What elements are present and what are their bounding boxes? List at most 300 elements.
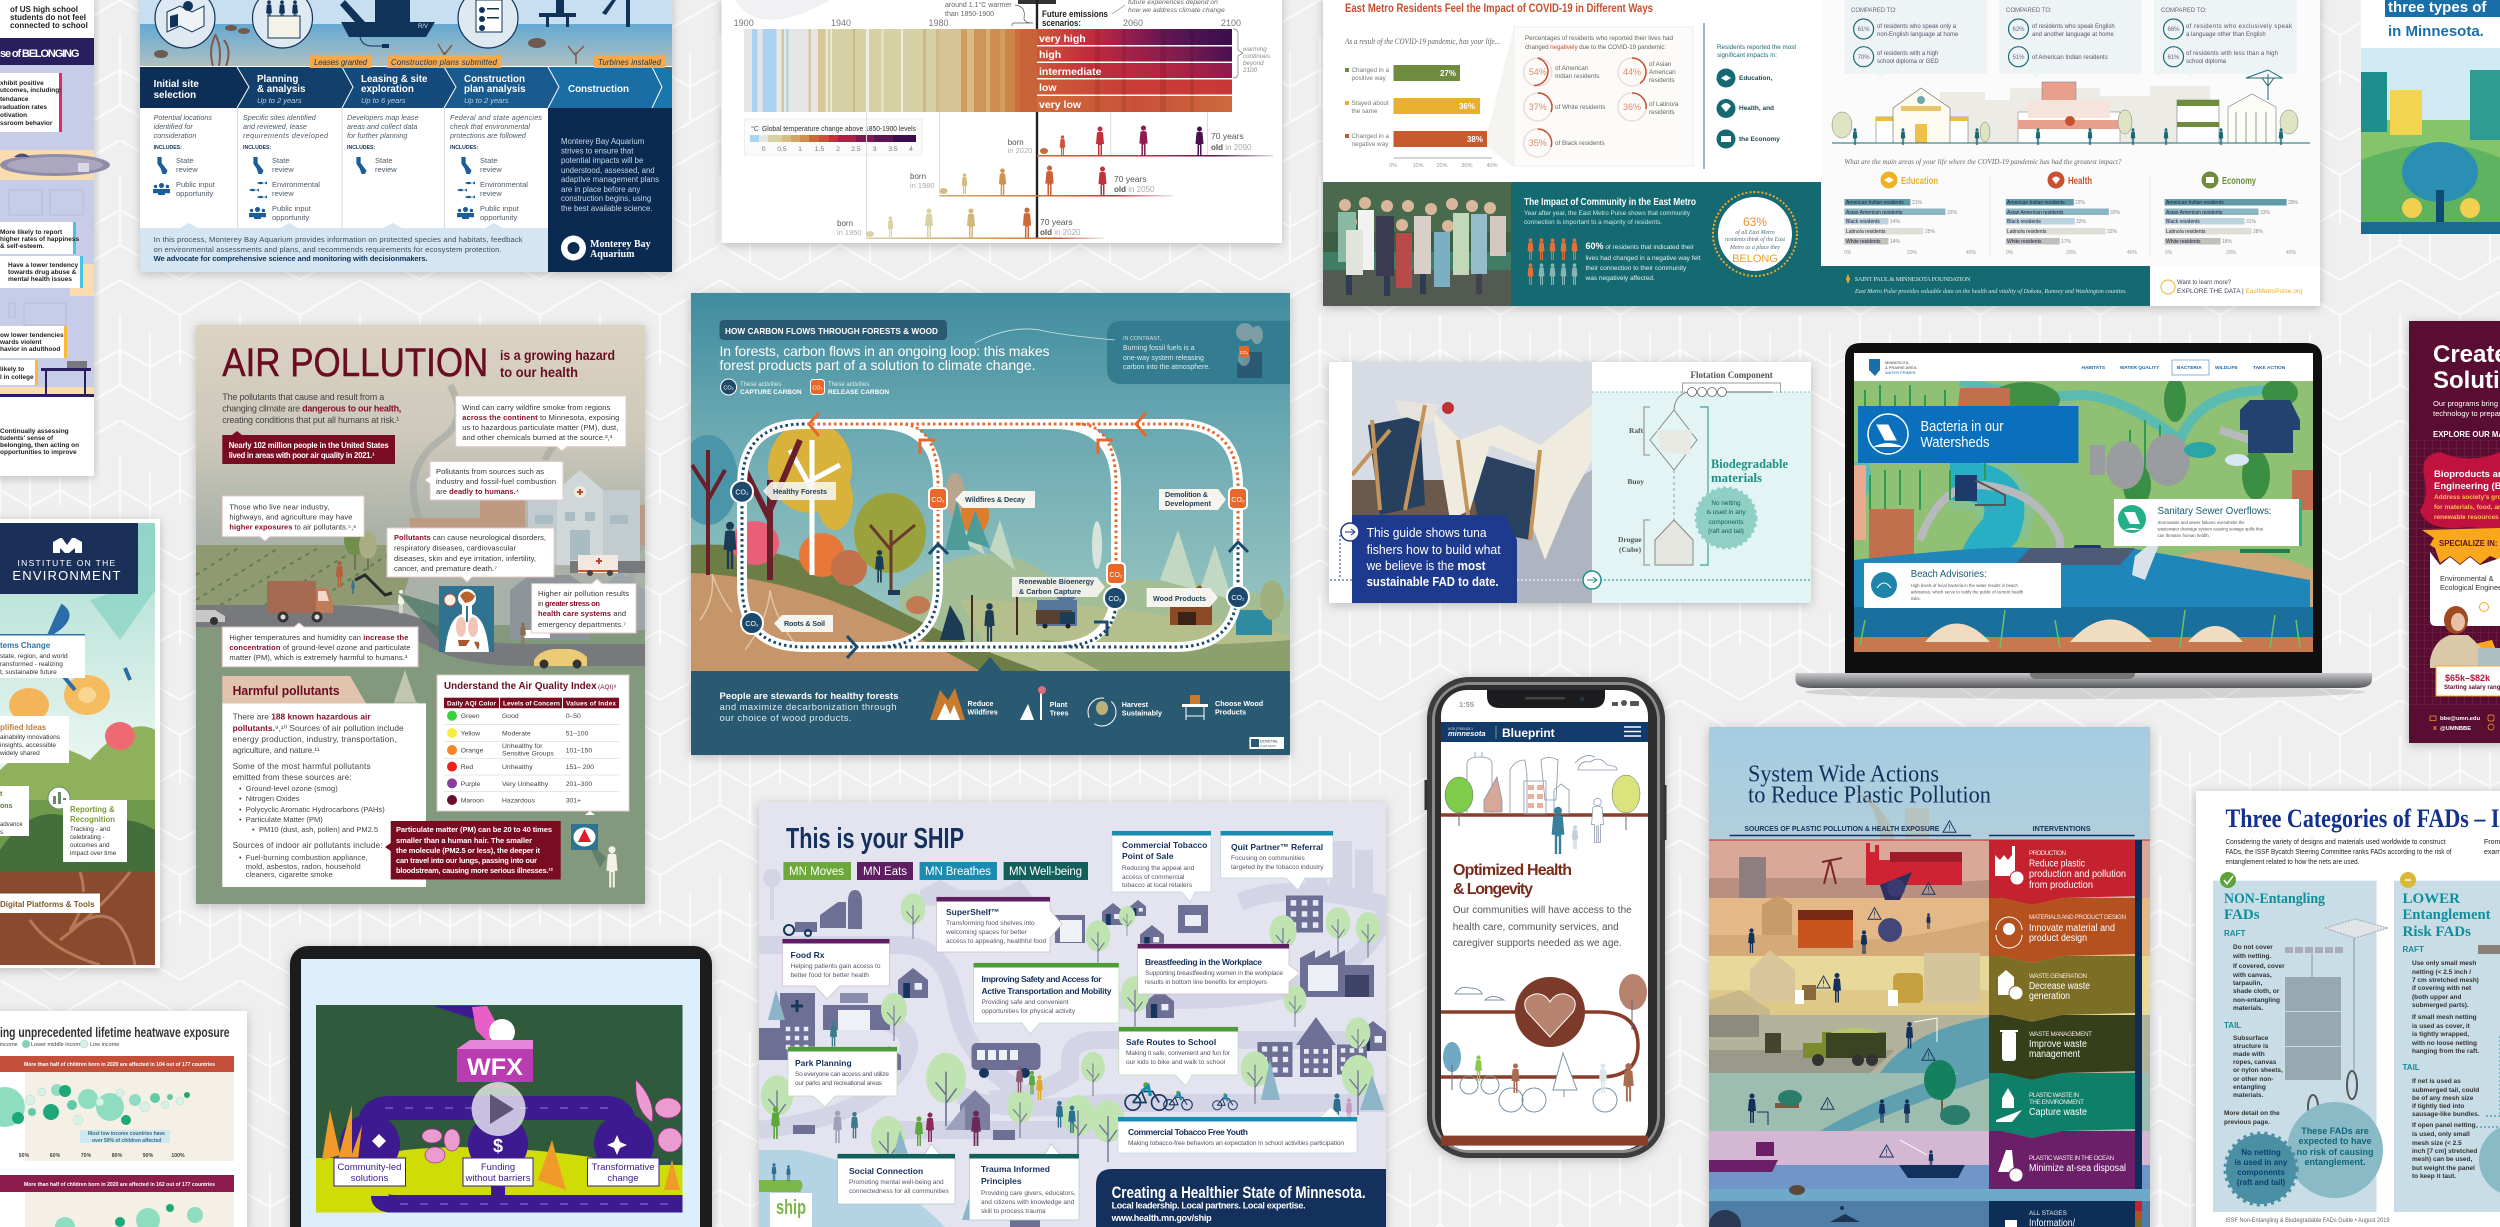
harmful pollutants box: There are 188 known hazardous air (233, 712, 371, 722)
notch and status bar: 1:55 (1459, 700, 1474, 709)
no netting starburst: is used in any (2235, 1158, 2288, 1167)
tail rules: or other non- (2233, 1076, 2273, 1083)
heading: AIR POLLUTION (222, 341, 488, 385)
body text: health care, community services, and (1453, 922, 1619, 933)
advocacy note (140, 223, 548, 272)
card: safety and access: Providing safe and convenient (982, 999, 1069, 1006)
step descriptions: consideration (154, 131, 196, 140)
houses and park (344, 525, 645, 640)
buildings (759, 896, 1374, 1227)
program tags (783, 862, 1088, 880)
charts: education, health, economy: 18% (2222, 239, 2233, 245)
charts: education, health, economy: Asian American residents (1846, 210, 1903, 216)
charts: education, health, economy: American Indian residents (2007, 200, 2065, 206)
soil and roots (0, 872, 155, 965)
callout: temperature and humidity (222, 623, 418, 667)
comparison boxes: of American Indian residents (2032, 55, 2108, 61)
bracket note: 2100 (1242, 67, 1258, 74)
community impact panel: 63% (1743, 215, 1767, 229)
card: amplified ideas: plified Ideas (0, 723, 47, 732)
label: funding without barriers: without barriers (465, 1173, 531, 1184)
raft rules: RAFT (2224, 929, 2245, 938)
app header: Blueprint (1502, 726, 1555, 740)
houses (877, 900, 1388, 1070)
card: drug abuse: towards drug abuse & (8, 269, 77, 276)
air quality index table: Hazardous (502, 798, 535, 804)
charts: education, health, economy: Black residents (2007, 219, 2041, 225)
legend (744, 119, 922, 155)
no netting starburst: components (1709, 519, 1743, 526)
tail rules: materials. (2233, 1092, 2264, 1099)
card: park planning: Park Planning (795, 1058, 852, 1068)
comparison boxes: COMPARED TO: (1851, 8, 1897, 14)
panel: offshore wind process (Monterey Bay Aquarium): State (375, 156, 393, 165)
red band: More than half of children born in 2020 are affected in 104 out of 177 countries (24, 1062, 215, 1068)
column separators (238, 108, 444, 228)
guide statement: sustainable FAD to date. (1367, 574, 1499, 589)
community impact panel: BELONG (1732, 253, 1778, 265)
card: amplified ideas: widely shared (0, 750, 40, 757)
card: violent behavior: wards violent (0, 339, 42, 346)
step descriptions: for further planning (347, 131, 407, 140)
tail rules: ropes, canvas (2233, 1059, 2277, 1066)
air quality index table: Values of Index (566, 700, 616, 708)
flotation component diagram: Drogue (1618, 535, 1642, 544)
river (1856, 381, 2270, 625)
intervention text: THE ENVIRONMENT (2029, 1099, 2084, 1106)
process chevrons: Construction (464, 74, 525, 85)
air quality index table: Green (461, 713, 480, 720)
bracket note: beyond (1243, 60, 1264, 67)
info card: sanitary sewer overflows (2114, 499, 2302, 546)
phone screen (1441, 690, 1648, 1150)
card: tobacco free youth (1118, 1107, 1357, 1153)
card: safety and access: Active Transportation and Mobility (982, 986, 1112, 996)
comparison boxes: 70% (1858, 55, 1870, 61)
bracket note (1233, 29, 1271, 78)
heading: to our health (500, 364, 578, 380)
card: positive outcomes: xhibit positive (0, 80, 44, 87)
generation timeline 2020: 70 years (1211, 131, 1244, 141)
harmful pollutants box: PM10 (dust, ash, pollen) and PM2.5 (259, 825, 378, 834)
contrast box: one-way system releasing (1123, 355, 1204, 362)
marine life (154, 25, 584, 66)
intro: entanglement related to how the nets are used. (2226, 859, 2360, 866)
panel: offshore wind process (Monterey Bay Aquarium) (140, 0, 672, 272)
process chevrons: plan analysis (464, 84, 526, 95)
closing text: tudents' sense of (0, 435, 54, 442)
raft rules: 7 cm stretched mesh) (2412, 977, 2479, 984)
card: systems change: tems Change (0, 641, 51, 650)
expected result circle (2287, 1102, 2383, 1198)
activity labels: Healthy Forests (773, 487, 827, 496)
annotation and axis: 100% (171, 1153, 185, 1159)
charts: education, health, economy: 21% (1912, 200, 1923, 206)
card: drug abuse (0, 256, 83, 288)
future scenario bands (1037, 29, 1232, 112)
carbon nodes: CO₂ (745, 621, 759, 628)
significant impacts list: Education, (1739, 75, 1772, 82)
vehicle: delivery truck (267, 581, 333, 622)
step descriptions: identified for (154, 122, 193, 131)
card: food rx (782, 939, 889, 999)
tail rules: mesh size (< 2.5 (2412, 1140, 2462, 1147)
community impact panel: was negatively affected. (1584, 275, 1655, 282)
side buttons (1426, 780, 1665, 840)
intervention text: Decrease waste (2029, 981, 2090, 992)
stewardship band: Plant (1050, 700, 1068, 709)
annotation and axis: 80% (112, 1153, 123, 1159)
olive tree (854, 493, 926, 590)
air quality index table: 101–150 (566, 748, 592, 754)
card: positive outcomes: raduation rates (0, 104, 47, 111)
charts: education, health, economy: 40% (2127, 250, 2138, 256)
intervention text: management (2029, 1049, 2080, 1060)
logo: ship (770, 1193, 812, 1227)
icon: checklist circle (458, 0, 518, 48)
legend: 2.5 (851, 146, 861, 153)
desk and floor (0, 361, 94, 397)
generation timeline 1980: born (910, 172, 926, 181)
title card (1858, 406, 2078, 463)
main statement (720, 343, 1050, 373)
year axis: 2100 (1221, 18, 1241, 28)
step descriptions: Potential locations (154, 113, 212, 122)
milestone tags: Leases granted (314, 58, 368, 67)
bar chart: life change: 30% (1461, 163, 1473, 169)
card: systems change: ransformed - realizing (0, 661, 63, 668)
card: drug abuse: Have a lower tendency (8, 262, 78, 269)
air quality index table: 0–50 (566, 713, 581, 720)
includes labels (154, 145, 479, 151)
stewardship band: and maximize decarbonization through (720, 702, 896, 713)
grey road (1920, 430, 2280, 580)
tail rules: entangling (2233, 1084, 2266, 1091)
callout: temperature and humidity: concentration of ground-level ozone and particulate (229, 643, 410, 652)
air quality index table: Orange (461, 748, 484, 754)
label: community-led solutions: Community-led (338, 1162, 401, 1173)
card: reporting and recognition (63, 800, 127, 862)
panel: offshore wind process (Monterey Bay Aquarium): review (272, 189, 294, 198)
aquarium statement panel: strives to ensure that (561, 146, 634, 156)
tablet screen (301, 959, 700, 1227)
tagline block: Local leadership. Local partners. Local expertise. (1112, 1200, 1306, 1210)
callout connector (1487, 27, 1514, 166)
intervention text: Capture waste (2029, 1107, 2087, 1118)
activity labels: Roots & Soil (784, 619, 825, 628)
intro paragraph (222, 392, 401, 425)
crimson blob: renewable resources (2434, 514, 2499, 521)
callout: health care stress (532, 579, 636, 633)
raft rules: tarpaulin, (2233, 980, 2262, 987)
legend: 0.5 (777, 146, 787, 153)
info card: beach advisories: risks. (1911, 596, 1921, 601)
guide statement: fishers how to build what (1367, 542, 1501, 557)
grey arc (735, 0, 830, 20)
icon: turbine platform (539, 0, 630, 27)
charts: education, health, economy: 39% (2288, 200, 2299, 206)
legend: capture and release: CAPTURE CARBON (740, 389, 802, 396)
aquarium statement panel: Monterey Bay Aquarium (561, 137, 644, 146)
process chevrons (140, 67, 672, 108)
roots (700, 574, 800, 650)
community impact panel: their connection to their community (1586, 265, 1687, 272)
charts: education, health, economy: Health (2068, 176, 2092, 187)
feature icons (372, 1134, 627, 1156)
bar chart: life change: positive way (1352, 75, 1387, 82)
sleeve and hand (434, 1006, 515, 1045)
intro paragraph: creating conditions that put all humans at risk.¹ (222, 415, 399, 425)
column heading (2402, 891, 2491, 940)
laptop lid (1845, 343, 2322, 673)
card: park planning: So everyone can access and utilize (795, 1071, 889, 1078)
aquarium statement panel: potential impacts will be (561, 156, 643, 165)
page title: East Metro Residents Feel the Impact of COVID-19 in Different Ways (1345, 3, 1653, 15)
grid pattern (2409, 440, 2500, 706)
negative impact by group: American (1649, 69, 1676, 76)
callout: temperature and humidity: matter (PM), which is extremely harmful to humans.³ (229, 653, 408, 662)
card: happiness: & self-esteem. (0, 243, 44, 250)
no netting starburst: No netting (2241, 1148, 2281, 1157)
heading pill (720, 320, 947, 340)
panel: offshore wind process (Monterey Bay Aquarium): State (480, 156, 498, 165)
tail rules: previous page. (2224, 1119, 2270, 1126)
panel: three categories of FADs (2196, 791, 2500, 1227)
icon: research vessel (340, 0, 435, 48)
heading: in Minnesota. (2388, 23, 2484, 40)
expected result circle: entanglement. (2304, 1157, 2366, 1167)
raft rules: Do not cover (2233, 944, 2273, 951)
callout: wildfire smoke: us to hazardous particulate matter (PM), dust, (462, 423, 618, 432)
crimson blob (2420, 452, 2500, 535)
town illustration (1832, 70, 2310, 145)
watershed illustration (1854, 378, 2313, 652)
intervention text: Innovate material and (2029, 923, 2115, 934)
comparison boxes: school diploma (2186, 59, 2227, 65)
legend: 3 (873, 146, 877, 153)
top annotations: than 1850-1900 (945, 11, 994, 18)
dam and water (1854, 548, 2310, 652)
charts: education, health, economy: American Indian residents (2166, 200, 2224, 206)
plant illustration (0, 604, 155, 880)
activity labels: Renewable Bioenergy (1019, 577, 1094, 586)
stewardship band: Sustainably (1122, 708, 1162, 718)
raft rules: if covering with net (2412, 985, 2472, 992)
statistic text: of US high school (10, 5, 78, 14)
tail rules: to keep it taut. (2412, 1173, 2456, 1180)
comparison boxes: non-English language at home (1877, 32, 1959, 38)
callout: health conditions: Pollutants can cause neurological disorders, (394, 533, 546, 542)
card: amplified ideas (0, 716, 69, 763)
lake bed and rocks (1854, 610, 2313, 652)
intervention text: from production (2029, 880, 2093, 891)
negative impact by group: changed negatively due to the COVID-19 pandemic: (1525, 44, 1666, 51)
activity labels: & Carbon Capture (1019, 587, 1081, 596)
legend: 3.5 (888, 146, 898, 153)
biodegradable label: Biodegradable (1711, 457, 1788, 471)
process chevrons: Up to 2 years (464, 96, 509, 105)
lavender background (0, 65, 94, 395)
card: quit partner: targeted by the tobacco industry (1231, 864, 1324, 871)
panel: offshore wind process (Monterey Bay Aquarium): review (375, 165, 397, 174)
column heading: NON-Entangling (2224, 891, 2325, 907)
raft rules: If covered, cover (2233, 963, 2285, 970)
column heading: Risk FADs (2402, 924, 2471, 940)
card: happiness: higher rates of happiness (0, 236, 79, 243)
no netting starburst: is used in any (1706, 509, 1746, 516)
air quality index table: Understand the Air Quality Index (444, 681, 597, 692)
panel: offshore wind process (Monterey Bay Aquarium): review (480, 165, 502, 174)
tail rules: but weight the panel (2412, 1165, 2475, 1172)
website header: HABITATS (2082, 365, 2106, 371)
blue tree (678, 435, 738, 575)
callout: temperature and humidity: Higher temperatures and humidity can increase the (229, 633, 408, 642)
annotation and axis: 90% (143, 1153, 154, 1159)
carbon nodes: CO₂ (1108, 596, 1122, 603)
card: quit partner (1221, 831, 1333, 890)
negative impact by group: of Black residents (1555, 140, 1605, 147)
particulate matter callout: can travel into our lungs, passing into our (396, 856, 537, 865)
legend: capture and release: These activities (740, 382, 781, 388)
generation timeline 2020 (1008, 126, 1273, 156)
purple roads (370, 1108, 683, 1204)
main street shops (2177, 70, 2282, 143)
expected result circle: These FADs are (2301, 1126, 2369, 1136)
stewardship band (691, 657, 1290, 755)
diagram hints (2476, 945, 2500, 1196)
canoe (759, 1163, 802, 1192)
legend: capture and release (721, 379, 889, 396)
contact footer: @UMNBBE (2440, 726, 2471, 732)
harmful pollutants box: Particulate Matter (PM) (246, 815, 323, 824)
comparison boxes: 62% (2012, 27, 2025, 33)
card: supershelf: access to appealing, healthful food (946, 938, 1046, 945)
info card: sanitary sewer overflows: can threaten human health. (2158, 533, 2210, 538)
milestone tags (310, 55, 665, 68)
card: partial text: advance (0, 822, 23, 828)
icon: chart circle (48, 787, 70, 809)
raft rules: If small mesh netting (2412, 1014, 2477, 1021)
intervention text: WASTE GENERATION (2029, 973, 2087, 980)
skyline (763, 841, 1373, 920)
air quality index table: Good (502, 713, 519, 720)
community impact panel: The Impact of Community in the East Metro (1524, 197, 1696, 208)
title card: Bacteria in our (1920, 418, 2004, 435)
callout: fossil fuel (425, 462, 563, 500)
feature circles (340, 1116, 654, 1158)
salary box: $65k–$82k (2445, 673, 2491, 683)
air quality index table: 151– 200 (566, 764, 594, 771)
panel: Institute on the Environment (0, 519, 160, 968)
card: park planning (788, 1047, 897, 1107)
legend: capture and release: RELEASE CARBON (828, 389, 889, 396)
card: systems change: t, sustainable future (0, 669, 57, 676)
negative impact by group: residents (1649, 109, 1675, 116)
comparison boxes: school diploma or GED (1877, 59, 1939, 65)
foundation footer: East Metro Pulse provides valuable data on the health and vitality of Dakota, Ramsey and Washington counties. (1854, 288, 2127, 295)
flotation component diagram (1618, 370, 1780, 565)
vehicle: ambulance (578, 555, 618, 576)
community impact panel: Year after year, the East Metro Pulse shows that community (1524, 210, 1691, 217)
callout: health care stress: health care systems and (538, 609, 626, 618)
vehicle: yellow car (534, 649, 587, 668)
charts: education, health, economy: Education (1901, 176, 1938, 187)
callout: health conditions: respiratory diseases, cardiovascular (394, 544, 516, 552)
bracket note: warming (1243, 46, 1267, 53)
advocacy note: We advocate for comprehensive science and monitoring with decisionmakers. (154, 254, 428, 263)
column heading (2224, 891, 2325, 923)
raft rules: hanging from the raft. (2412, 1048, 2479, 1055)
row 3: waste generation scene (1709, 950, 1989, 1015)
card: college: likely to (0, 366, 24, 373)
callout: higher exposures (222, 496, 364, 541)
icon: harvest sustainably (1088, 698, 1116, 726)
bubble chart lower (25, 1192, 234, 1227)
tail rules: sausage-like bundles. (2412, 1111, 2480, 1118)
charts: education, health, economy: American Indian residents (1846, 200, 1904, 206)
card: violent behavior: havior in adulthood (0, 346, 60, 353)
legend: capture and release: These activities (828, 382, 869, 388)
planted saplings (972, 590, 1017, 645)
expected result circle: expected to have (2298, 1136, 2372, 1146)
comparison boxes: a language other than English (2186, 32, 2266, 38)
heading: to Reduce Plastic Pollution (1748, 783, 1991, 809)
far right ground (960, 600, 1290, 671)
row 4: waste management scene (1709, 1015, 1989, 1073)
heading (2433, 341, 2500, 394)
panel: offshore wind process (Monterey Bay Aquarium): review (272, 165, 294, 174)
process chevrons: Up to 2 years (257, 96, 302, 105)
activity labels: Demolition & (1165, 490, 1208, 499)
label: transformative change: change (607, 1173, 639, 1184)
panel: non-entangling column (2213, 872, 2388, 1212)
card: digital platforms: Digital Platforms & Tools (0, 900, 95, 909)
heart emblem and path (1441, 977, 1638, 1077)
website header (1854, 353, 2313, 382)
info card: beach advisories: Beach Advisories: (1911, 569, 1987, 580)
callout: fossil fuel: Pollutants from sources such as (436, 467, 544, 476)
includes labels: INCLUDES: (450, 145, 479, 151)
activity labels: Development (1165, 499, 1212, 508)
aquarium statement panel: are in place before any (561, 185, 640, 194)
includes labels: INCLUDES: (347, 145, 376, 151)
tail rules: inch [7 cm] stretched (2412, 1148, 2477, 1155)
vehicle: left car (196, 610, 225, 625)
heading band (0, 38, 94, 65)
significant impacts list (1704, 23, 1796, 169)
expected result circle: no risk of causing (2296, 1147, 2374, 1157)
panel: air pollution health hazard (196, 325, 645, 904)
top annotations: how we address climate change (1128, 7, 1225, 14)
harmful pollutants box: • (239, 784, 242, 793)
charts: education, health, economy: Black residents (1846, 219, 1880, 225)
charts: education, health, economy: 20% (2226, 250, 2237, 256)
ground (316, 1147, 683, 1213)
intervention text: Reduce plastic (2029, 859, 2085, 870)
community impact panel: Metro as a place they (1729, 245, 1780, 251)
legend: 0 (762, 146, 766, 153)
carbon nodes: CO₂ (1231, 595, 1245, 602)
card: supershelf: Transforming food shelves into (946, 920, 1035, 927)
legend: Global temperature change above 1850-1900 levels (762, 124, 916, 133)
card: commercial tobacco point of sale: Commercial Tobacco (1122, 840, 1207, 850)
laptop base (1796, 673, 2372, 688)
significant impacts list: Residents reported the most (1717, 44, 1796, 51)
generation timeline 1950 (837, 208, 1104, 239)
harmful pollutants box: pollutants.⁹,¹⁰ Sources of air pollution include (233, 723, 404, 733)
charts: education, health, economy: 33% (2260, 210, 2271, 216)
icon: plant trees (1020, 686, 1046, 720)
